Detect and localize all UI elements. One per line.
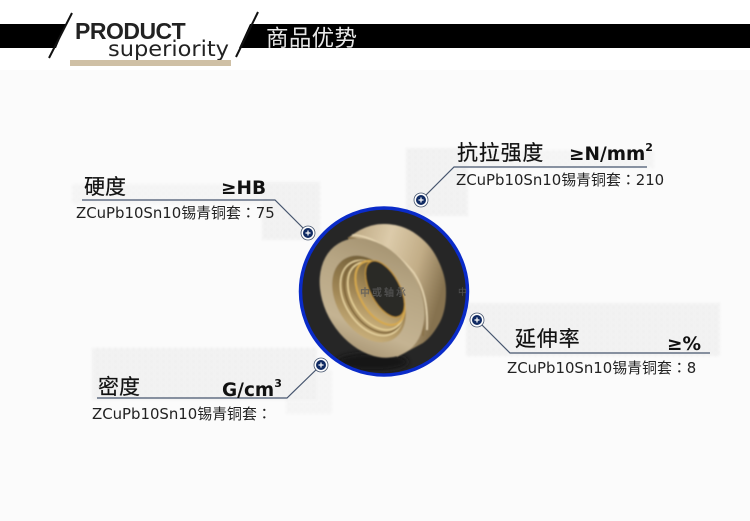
black band left [0,24,66,48]
callout: elongation [470,313,710,378]
leader line [421,167,647,200]
cylinder body [348,224,446,357]
callout: density [92,358,328,424]
thread rings [327,249,417,347]
tan underline [70,60,231,66]
title: 延伸率 [515,327,580,351]
heading: PRODUCT: PRODUCT [75,18,186,44]
unit: G/cm [222,380,274,401]
leader line [97,365,321,398]
value: ZCuPb10Sn10锡青铜套：8 [507,357,696,378]
faint side watermark: 中 [458,285,467,298]
title: 硬度 [84,175,126,199]
marker [414,193,428,207]
bushing [298,219,446,377]
unit: 2 [645,141,653,154]
header banner [0,12,750,66]
dark disc with blue ring [300,208,468,375]
front face [298,219,446,377]
left slash [49,13,72,58]
faint watermark: 中或轴承 [360,284,408,299]
heading: chinese title: 商品优势 [266,21,357,53]
unit: ≥N/mm [569,144,645,165]
right slash [236,12,258,57]
threaded bore [317,242,421,356]
product photo: brass bushing in blue ring [298,208,468,377]
leader line [477,320,710,353]
value: ZCuPb10Sn10锡青铜套： [92,403,272,424]
value: ZCuPb10Sn10锡青铜套：210 [456,169,664,190]
value: ZCuPb10Sn10锡青铜套：75 [76,202,275,223]
callout: tensile strength [414,141,664,207]
unit: ≥HB [221,178,266,199]
title: 抗拉强度 [457,141,544,165]
black band right [239,24,750,48]
shoulder groove [348,238,423,336]
unit: 3 [274,377,282,390]
reflection under the bushing [336,353,408,371]
title: 密度 [98,375,140,399]
marker [314,358,328,372]
marker [301,226,315,240]
callout: hardness [76,175,315,240]
leader line [82,200,308,233]
mottled patches behind callouts [72,148,720,414]
bore opening [357,255,413,323]
unit: ≥% [667,334,701,355]
heading: superiority: superiority [108,37,229,61]
marker [470,313,484,327]
